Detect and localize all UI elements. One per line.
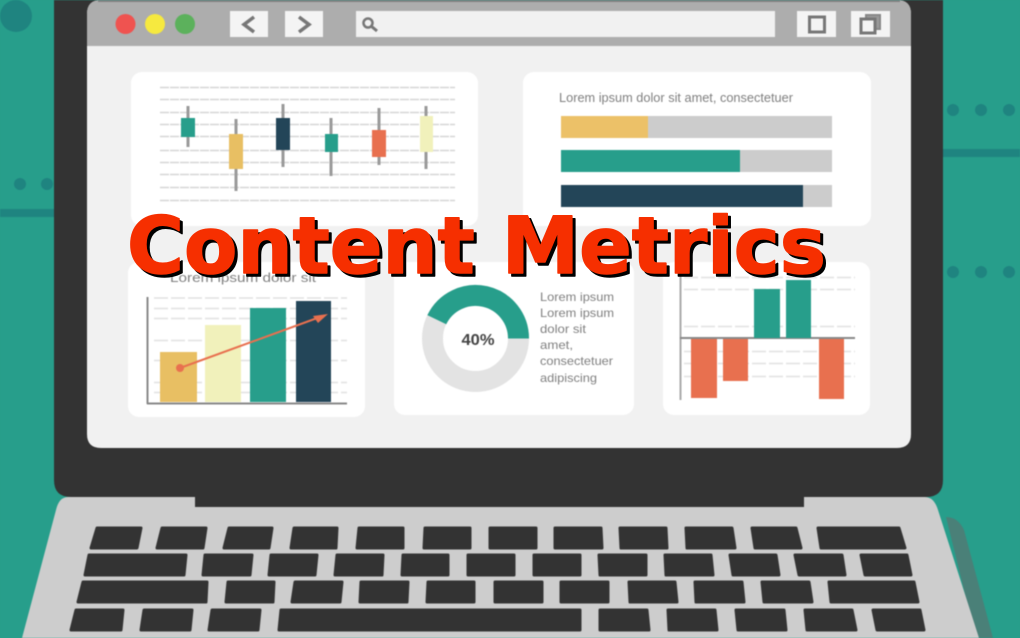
donut description: Lorem ipsum <box>540 290 614 304</box>
window buttons <box>116 14 195 34</box>
laptop lid <box>54 0 943 507</box>
title: Content Metrics <box>127 202 826 292</box>
laptop base <box>22 497 979 638</box>
laptop base shadow <box>946 517 993 638</box>
donut description: Lorem ipsum <box>540 306 614 320</box>
panel: candlestick chart <box>131 72 478 226</box>
back button <box>230 11 268 37</box>
keyboard row 1 <box>91 528 905 548</box>
panel: bar chart with arrow: Lorem ipsum dolor sit <box>170 270 316 285</box>
decoration: right background shapes <box>940 104 1020 278</box>
keyboard row 4 <box>71 610 924 630</box>
donut description <box>540 290 614 385</box>
trend arrow <box>176 314 328 372</box>
window control: maximize <box>797 11 836 37</box>
decoration: left background shapes <box>0 0 56 217</box>
panel: donut chart <box>394 262 634 415</box>
keyboard <box>71 528 924 630</box>
toolbar top edge <box>98 0 900 2</box>
panel: positive and negative bar chart <box>663 262 870 415</box>
browser toolbar <box>87 0 911 46</box>
keyboard row 2 <box>85 555 911 575</box>
window control: restore <box>851 11 890 37</box>
donut description: amet, <box>540 338 573 352</box>
donut description: dolor sit <box>540 322 587 336</box>
panel: bar chart with arrow <box>128 262 365 417</box>
address bar with search icon <box>356 11 775 37</box>
panel: horizontal progress bars <box>523 72 871 226</box>
donut description: adipiscing <box>540 371 597 385</box>
browser screen <box>87 0 911 448</box>
panel: donut chart: 40% <box>462 332 495 349</box>
keyboard row 3 <box>78 582 918 602</box>
donut description: consectetuer <box>540 354 613 368</box>
panel: horizontal progress bars: Lorem ipsum dolor sit amet, consectetuer <box>559 91 793 105</box>
forward button <box>285 11 323 37</box>
candles <box>188 104 426 191</box>
